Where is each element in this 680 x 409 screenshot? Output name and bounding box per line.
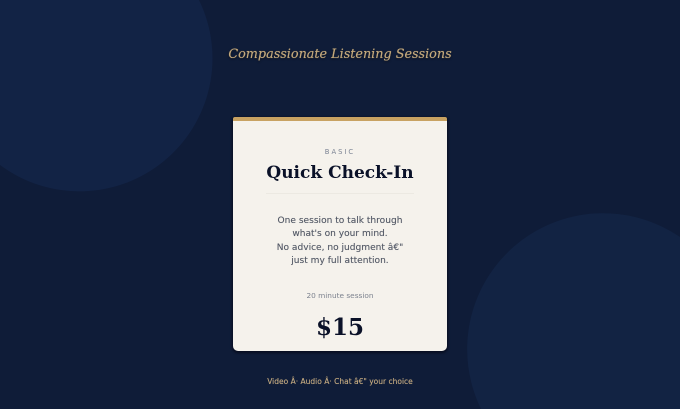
footer note: Video Â· Audio Â· Chat â€" your choice xyxy=(267,377,413,386)
description: just my full attention. xyxy=(291,256,389,266)
price: $15 xyxy=(316,314,364,340)
divider xyxy=(266,193,414,194)
description: One session to talk through xyxy=(278,216,402,226)
title: Compassionate Listening Sessions xyxy=(228,47,452,62)
tier label: BASIC xyxy=(325,148,355,156)
session duration: 20 minute session xyxy=(306,291,374,300)
panel: pricing card xyxy=(233,117,447,351)
description: what's on your mind. xyxy=(292,229,388,239)
card heading: Quick Check-In xyxy=(266,163,414,183)
description: No advice, no judgment â€" xyxy=(277,243,403,253)
description xyxy=(277,216,403,266)
